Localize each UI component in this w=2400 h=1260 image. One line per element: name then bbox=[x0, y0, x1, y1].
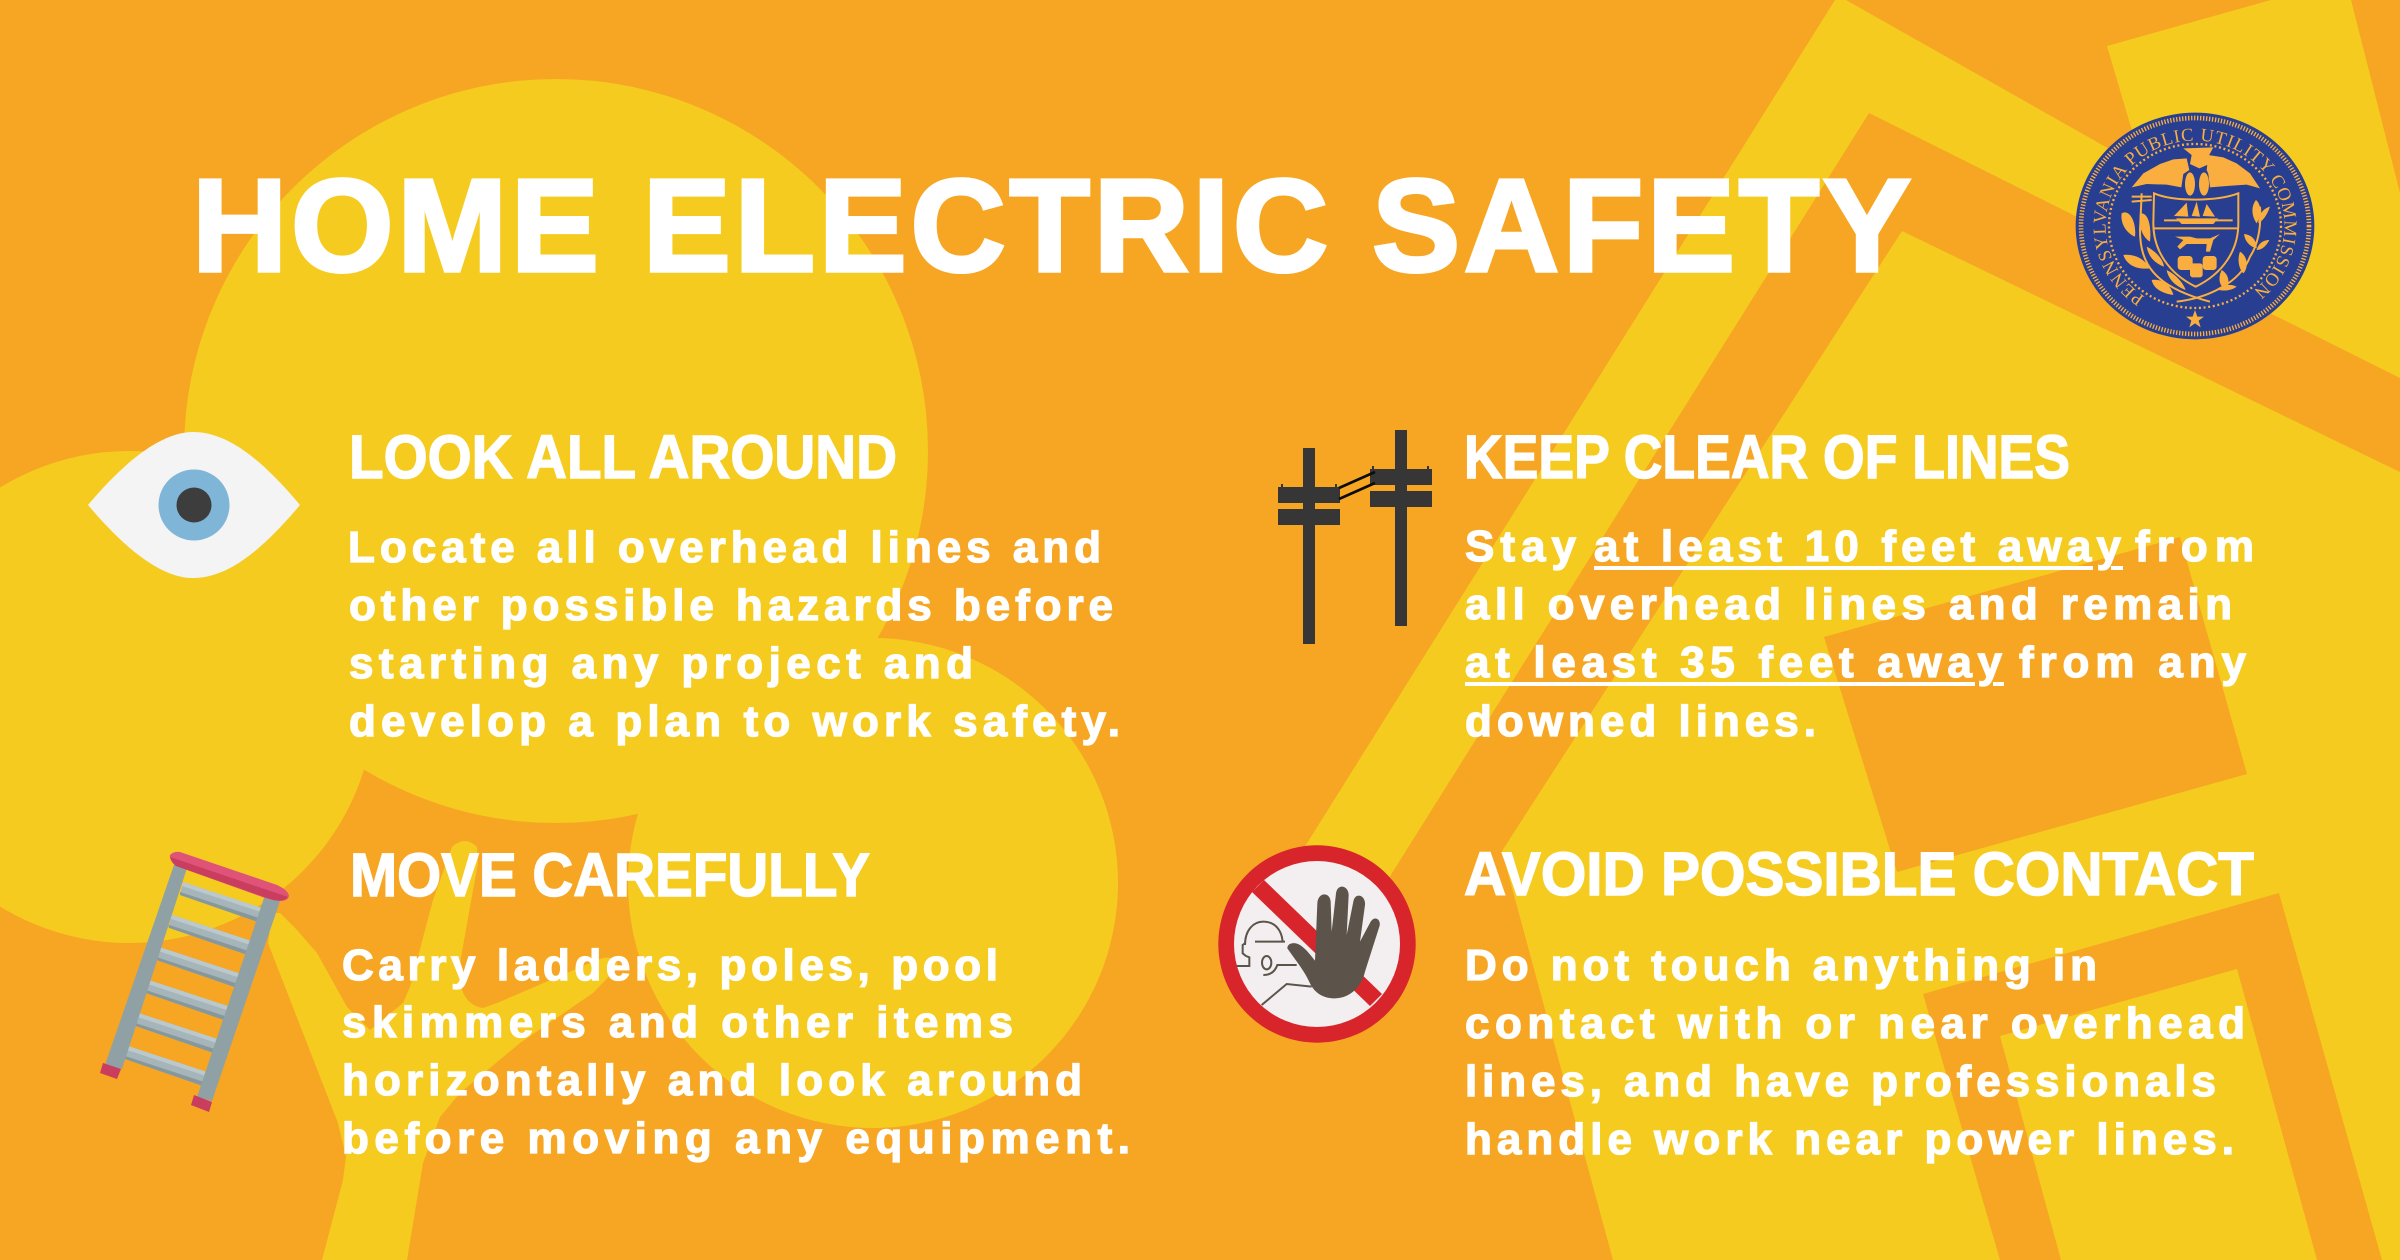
icon: Pennsylvania Public Utility Commission seal: PENNSYLVANIA PUBLIC UTILITY COMMISSION bbox=[2094, 128, 2297, 306]
icon: eye bbox=[88, 432, 300, 578]
heading: keep clear of lines: KEEP CLEAR OF LINES bbox=[1464, 423, 2070, 491]
body text: look all around: Locate all overhead lines and bbox=[348, 523, 1101, 572]
body text: keep clear of lines: at least 35 feet away bbox=[1465, 638, 2003, 687]
icon: stop hand sign bbox=[1218, 845, 1416, 1043]
body text: keep clear of lines: from any bbox=[2019, 638, 2247, 687]
body text: keep clear of lines: at least 10 feet away bbox=[1594, 522, 2122, 571]
panel: avoid possible contact bbox=[1218, 840, 2254, 1164]
panel: move carefully bbox=[100, 841, 1130, 1163]
icon: ladder bbox=[100, 852, 289, 1112]
body text: avoid possible contact: handle work near power lines. bbox=[1465, 1115, 2234, 1164]
body text: avoid possible contact: contact with or near overhead bbox=[1465, 999, 2245, 1048]
body text: avoid possible contact: Do not touch anything in bbox=[1465, 941, 2097, 990]
body text: move carefully: horizontally and look around bbox=[342, 1056, 1082, 1105]
body text: look all around bbox=[348, 523, 1120, 746]
body text: move carefully: skimmers and other items bbox=[342, 998, 1013, 1047]
body text: move carefully: before moving any equipment. bbox=[342, 1114, 1130, 1163]
body text: keep clear of lines: all overhead lines and remain bbox=[1465, 580, 2232, 629]
body text: look all around: other possible hazards before bbox=[349, 581, 1113, 630]
body text: avoid possible contact bbox=[1465, 941, 2245, 1164]
heading: move carefully: MOVE CAREFULLY bbox=[350, 841, 870, 909]
heading: look all around: LOOK ALL AROUND bbox=[349, 423, 897, 491]
body text: move carefully: Carry ladders, poles, pool bbox=[342, 941, 998, 990]
heading: avoid possible contact: AVOID POSSIBLE CONTACT bbox=[1464, 840, 2254, 908]
body text: keep clear of lines: downed lines. bbox=[1465, 697, 1816, 746]
body text: avoid possible contact: lines, and have professionals bbox=[1465, 1057, 2216, 1106]
body text: look all around: develop a plan to work safety. bbox=[349, 697, 1120, 746]
panel: keep clear of lines bbox=[1278, 423, 2254, 746]
title: HOME ELECTRIC SAFETY bbox=[192, 152, 1911, 299]
body text: keep clear of lines bbox=[1465, 522, 2254, 746]
body text: keep clear of lines: from bbox=[2135, 522, 2254, 571]
icon: utility poles bbox=[1278, 430, 1432, 644]
body text: look all around: starting any project and bbox=[349, 639, 973, 688]
body text: move carefully bbox=[342, 941, 1130, 1163]
panel: look all around bbox=[88, 423, 1120, 746]
body text: keep clear of lines: Stay bbox=[1465, 522, 1577, 571]
